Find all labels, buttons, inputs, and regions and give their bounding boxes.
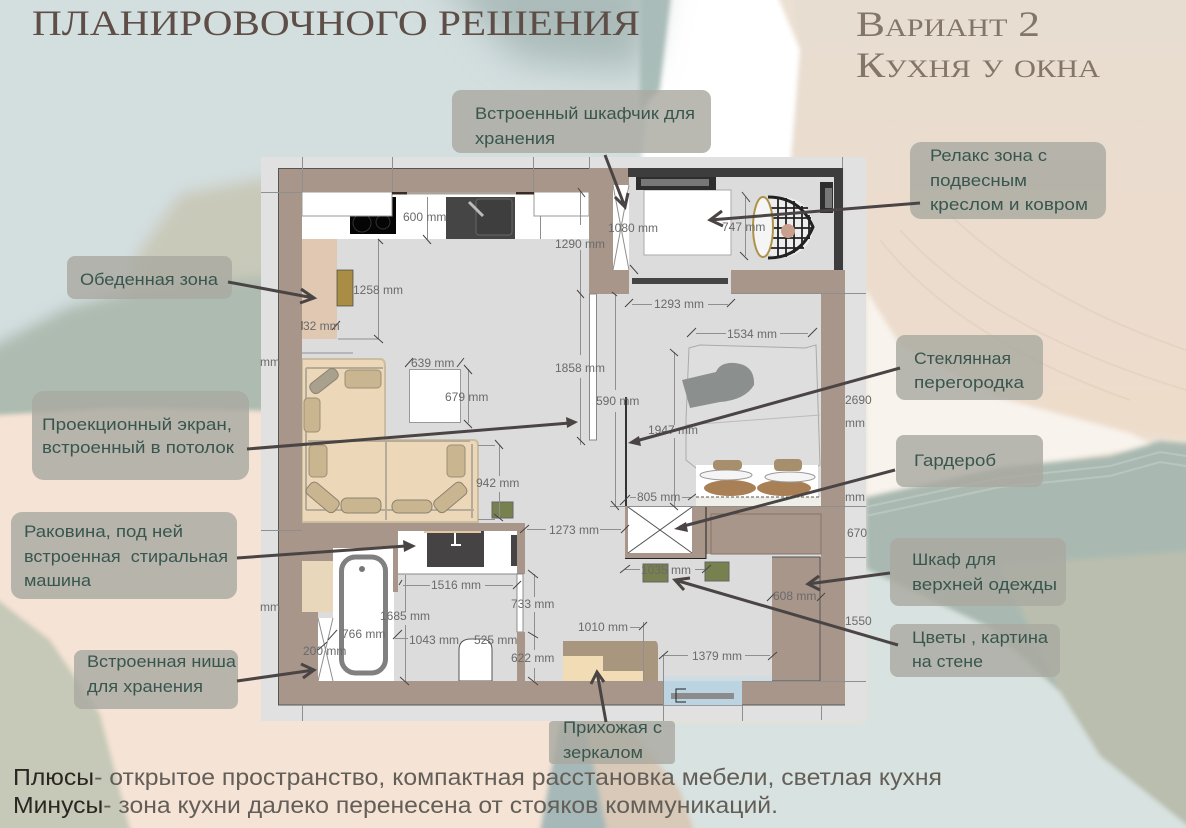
dimensions text: 2690 [845,393,872,407]
dimensions text: mm [260,355,280,369]
dimensions text: 600 mm [403,210,446,224]
dimensions text: 1379 mm [692,649,742,663]
sofa [302,359,478,522]
dimensions text: 1043 mm [409,633,459,647]
callout: projection screen [32,391,249,480]
subtitle: variant [856,4,1100,85]
dimensions text: 1858 mm [555,361,605,375]
callout: built-in cabinet [452,90,711,153]
outerwear closet [772,557,821,681]
floor plan [260,157,872,721]
callout: hallway mirror: зеркалом [563,743,643,762]
dimensions text: 1534 mm [727,327,777,341]
arrow: built-in niche [237,664,314,681]
arrow: flowers [675,578,898,645]
dimensions text: 590 mm [596,394,639,408]
text: pros: Плюсы - открытое пространство, компактная расстановка мебели, светлая кухня [13,764,942,790]
callout: sink [11,512,237,599]
relax zone [632,177,833,284]
dimensions text: 733 mm [511,597,554,611]
dimensions text: 1035 mm [641,563,691,577]
glass partition [590,294,626,506]
dimensions text: 1258 mm [353,283,403,297]
subtitle: variant: Вариант 2 [856,4,1040,44]
callout: flowers: Цветы , картина [912,628,1049,647]
bathroom [318,531,517,681]
dimensions text: 200 mm [303,644,346,658]
hallway bench [563,641,658,681]
callout: sink: встроенная стиральная [24,547,228,566]
dimensions text: mm [845,490,865,504]
callout: glass partition: перегородка [914,373,1025,392]
dimensions text [260,210,872,665]
callout: glass partition [896,335,1043,400]
callout: built-in niche: для хранения [87,677,203,696]
arrowhead: wardrobe [674,522,688,532]
dimensions text: 670 [847,526,867,540]
dimensions text: 1516 mm [431,578,481,592]
window [663,676,772,705]
arrowhead: projection screen [566,417,578,428]
arrow: dining zone [228,282,314,303]
built-in cabinet [613,185,629,270]
dimensions text: 1550 [845,614,872,628]
dimensions text: 1080 mm [608,221,658,235]
callout: flowers: на стене [912,652,983,671]
bed [682,345,821,506]
callout: projection screen: встроенный в потолок [42,438,235,457]
coffee table [410,370,460,422]
dimensions text: 1947 mm [648,423,698,437]
arrowhead: sink [403,540,416,552]
arrow: wardrobe [680,470,895,527]
callout: built-in cabinet: Встроенный шкафчик для [475,104,695,123]
callout: built-in cabinet: хранения [475,129,555,148]
dimensions text: mm [845,416,865,430]
arrow: outerwear closet [808,573,890,590]
text: cons: Минусы - зона кухни далеко перенесена от стояков коммуникаций. [13,792,778,818]
arrow: hallway mirror [591,672,606,722]
callout: hallway mirror: Прихожая с [563,718,663,737]
arrow: built-in cabinet [605,155,628,207]
arrow: projection screen [247,423,570,449]
callout: relax zone: подвесным [930,171,1027,190]
callout: outerwear closet [890,538,1066,606]
arrow: relax zone [710,203,920,226]
callout: wardrobe: Гардероб [914,451,996,470]
callout: relax zone: Релакс зона с [930,146,1048,165]
callout: outerwear closet: верхней одежды [912,575,1057,594]
callout: flowers [890,624,1060,677]
dimensions text: 805 mm [637,490,680,504]
dimensions text: 1685 mm [380,609,430,623]
dimensions text: 942 mm [476,476,519,490]
callout: glass partition: Стеклянная [914,349,1011,368]
dimensions text: 679 mm [445,390,488,404]
callout: built-in niche [74,650,238,709]
hanging chair [751,197,813,258]
dimensions text: 766 mm [342,627,385,641]
dimensions text: 525 mm [474,633,517,647]
callout: projection screen: Проекционный экран, [42,415,232,434]
dimensions text: 1273 mm [549,523,599,537]
callout: relax zone: креслом и ковром [930,195,1088,214]
dimensions text: 1010 mm [578,620,628,634]
arrow: glass partition [636,368,900,441]
wardrobe [625,506,821,558]
callout: dining zone: Обеденная зона [80,270,219,289]
dining table [302,239,353,339]
callout: wardrobe [896,435,1043,487]
callout: relax zone [910,142,1106,219]
callout: sink: машина [24,571,92,590]
callout: dining zone [67,256,232,299]
callout: hallway mirror [549,718,675,764]
dimensions text: 639 mm [411,356,454,370]
callout: sink: Раковина, под ней [24,522,183,541]
plants [492,502,729,582]
callout: outerwear closet: Шкаф для [912,550,996,569]
dimensions text: 32 mm [303,319,340,333]
arrowhead: glass partition [628,436,641,446]
dimensions text: mm [260,600,280,614]
walls [278,168,845,705]
arrow: sink [237,546,406,558]
dimensions text: 1290 mm [555,237,605,251]
title: ПЛАНИРОВОЧНОГО РЕШЕНИЯ [32,3,640,43]
dimension lines [261,157,866,721]
dimensions text: 1293 mm [654,297,704,311]
callout: built-in niche: Встроенная ниша [87,652,237,671]
dimensions text: 608 mm [773,589,816,603]
dimensions text: 747 mm [722,220,765,234]
subtitle: variant: Кухня у окна [856,45,1100,85]
dimensions text: 622 mm [511,651,554,665]
kitchen [302,192,589,239]
